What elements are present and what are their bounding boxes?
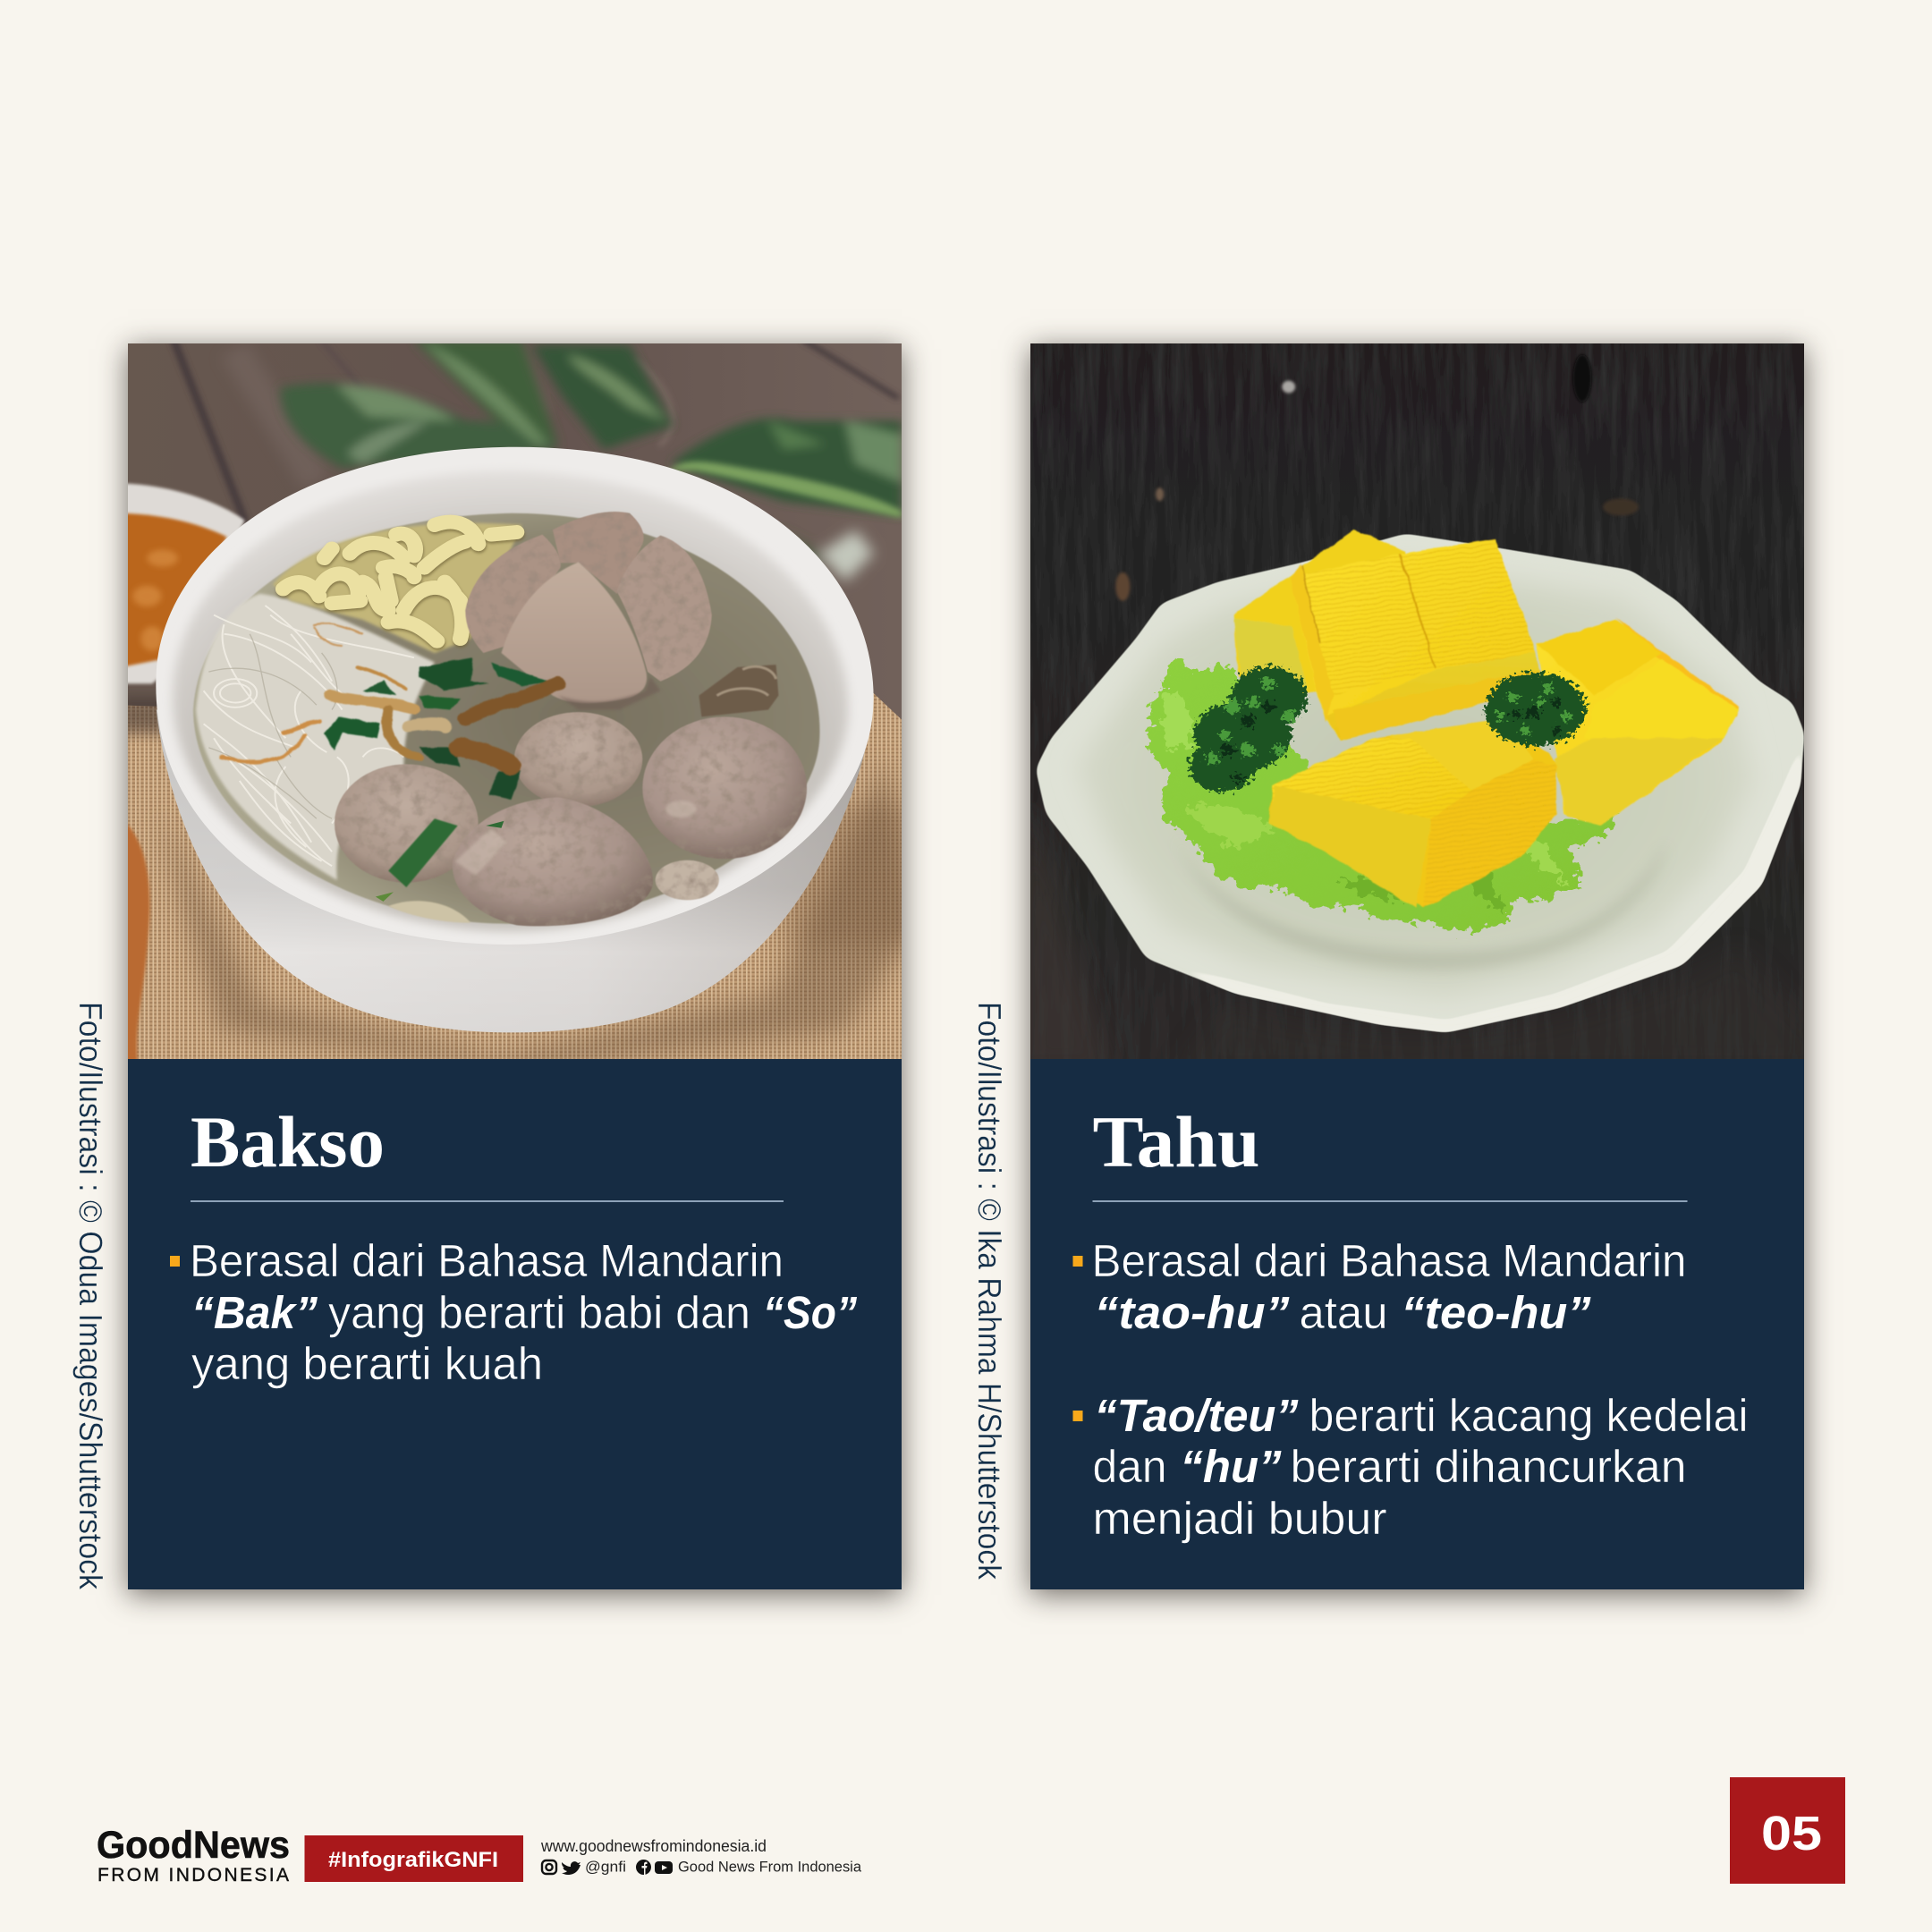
icon: facebook <box>636 1860 651 1875</box>
sauce bowl <box>116 483 244 683</box>
panel: Bakso card <box>128 343 902 1589</box>
text block: Tahu meaning: berarti kacang kedelai <box>1309 1390 1748 1441</box>
vermicelli <box>196 594 435 880</box>
bullet <box>1072 1256 1082 1267</box>
meatballs <box>514 712 642 807</box>
brown mushroom <box>699 665 778 716</box>
text block: Tahu etymology: atau <box>1299 1287 1387 1338</box>
text block: Tahu etymology: “teo-hu” <box>1401 1287 1591 1338</box>
yellow noodles <box>273 523 521 653</box>
photo credit: left: Foto/Ilustrasi : © Odua Images/Shutterstock <box>72 1002 109 1590</box>
hashtag badge <box>304 1835 523 1882</box>
leaf strip on meatball <box>388 818 458 887</box>
text block: Bakso etymology: yang berarti babi dan <box>328 1287 750 1338</box>
bullet <box>170 1256 180 1267</box>
icon: youtube <box>655 1861 673 1874</box>
panel: Tahu card <box>1030 343 1804 1589</box>
lettuce <box>1147 657 1616 933</box>
icon: twitter <box>562 1861 580 1875</box>
tofu back <box>1233 530 1430 696</box>
bullet <box>1072 1411 1082 1421</box>
heading: Tahu: Tahu <box>1092 1101 1259 1182</box>
tofu front <box>1268 719 1556 909</box>
hashtag badge: #InfografikGNFI <box>328 1848 498 1872</box>
photo: fried yellow tofu on plate <box>1030 343 1804 1059</box>
burlap <box>116 691 921 1073</box>
logo: GoodNews From Indonesia: GoodNews <box>97 1824 290 1867</box>
website url: www.goodnewsfromindonesia.id <box>540 1837 767 1855</box>
meatball halves <box>553 512 644 594</box>
text block: Tahu meaning: “Tao/teu” <box>1094 1390 1298 1441</box>
parsley <box>1189 666 1586 792</box>
text block: Tahu meaning: dan <box>1092 1441 1166 1492</box>
text block: Tahu etymology: “tao-hu” <box>1094 1287 1290 1338</box>
text block: Bakso etymology: “So” <box>763 1287 857 1338</box>
plate <box>1035 534 1804 1032</box>
text block: Tahu meaning: menjadi bubur <box>1092 1493 1386 1544</box>
text block: Tahu etymology: Berasal dari Bahasa Mandarin <box>1091 1235 1686 1286</box>
tofu group <box>1233 530 1739 909</box>
bowl rim <box>156 447 874 945</box>
page number <box>1730 1777 1845 1884</box>
icon: instagram <box>542 1860 556 1874</box>
text block: Bakso etymology: yang berarti kuah <box>191 1338 543 1389</box>
text block: Bakso etymology <box>190 1235 857 1389</box>
heading rule <box>191 1200 784 1202</box>
greens <box>281 341 902 515</box>
heading: Bakso: Bakso <box>191 1101 385 1182</box>
social handle: @gnfi <box>585 1859 626 1875</box>
heading rule <box>1092 1200 1687 1202</box>
tofu right <box>1536 620 1739 826</box>
logo: GoodNews From Indonesia: FROM INDONESIA <box>97 1865 289 1885</box>
photo credit: right: Foto/Ilustrasi : © Ika Rahma H/Shutterstock <box>971 1002 1008 1580</box>
logo: GoodNews From Indonesia <box>97 1824 290 1885</box>
photo: bowl of bakso <box>128 343 902 1059</box>
wooden spoon <box>116 814 150 1073</box>
social name: Good News From Indonesia <box>678 1859 862 1875</box>
bowl body <box>157 709 872 1032</box>
photo bottom panel: navy background <box>1030 1059 1804 1589</box>
text block: Tahu meaning <box>1092 1390 1748 1544</box>
text block: Bakso etymology: “Bak” <box>191 1287 318 1338</box>
tofu top main <box>1289 539 1541 741</box>
text block: Tahu meaning: “hu” <box>1180 1441 1281 1492</box>
photo bottom panel: navy background <box>128 1059 902 1589</box>
text block: Bakso etymology: Berasal dari Bahasa Mandarin <box>190 1235 784 1286</box>
text block: Tahu etymology <box>1091 1235 1686 1338</box>
text block: Tahu meaning: berarti dihancurkan <box>1290 1441 1686 1492</box>
page number: 05 <box>1761 1807 1822 1860</box>
herbs and fried shallots <box>222 623 558 800</box>
